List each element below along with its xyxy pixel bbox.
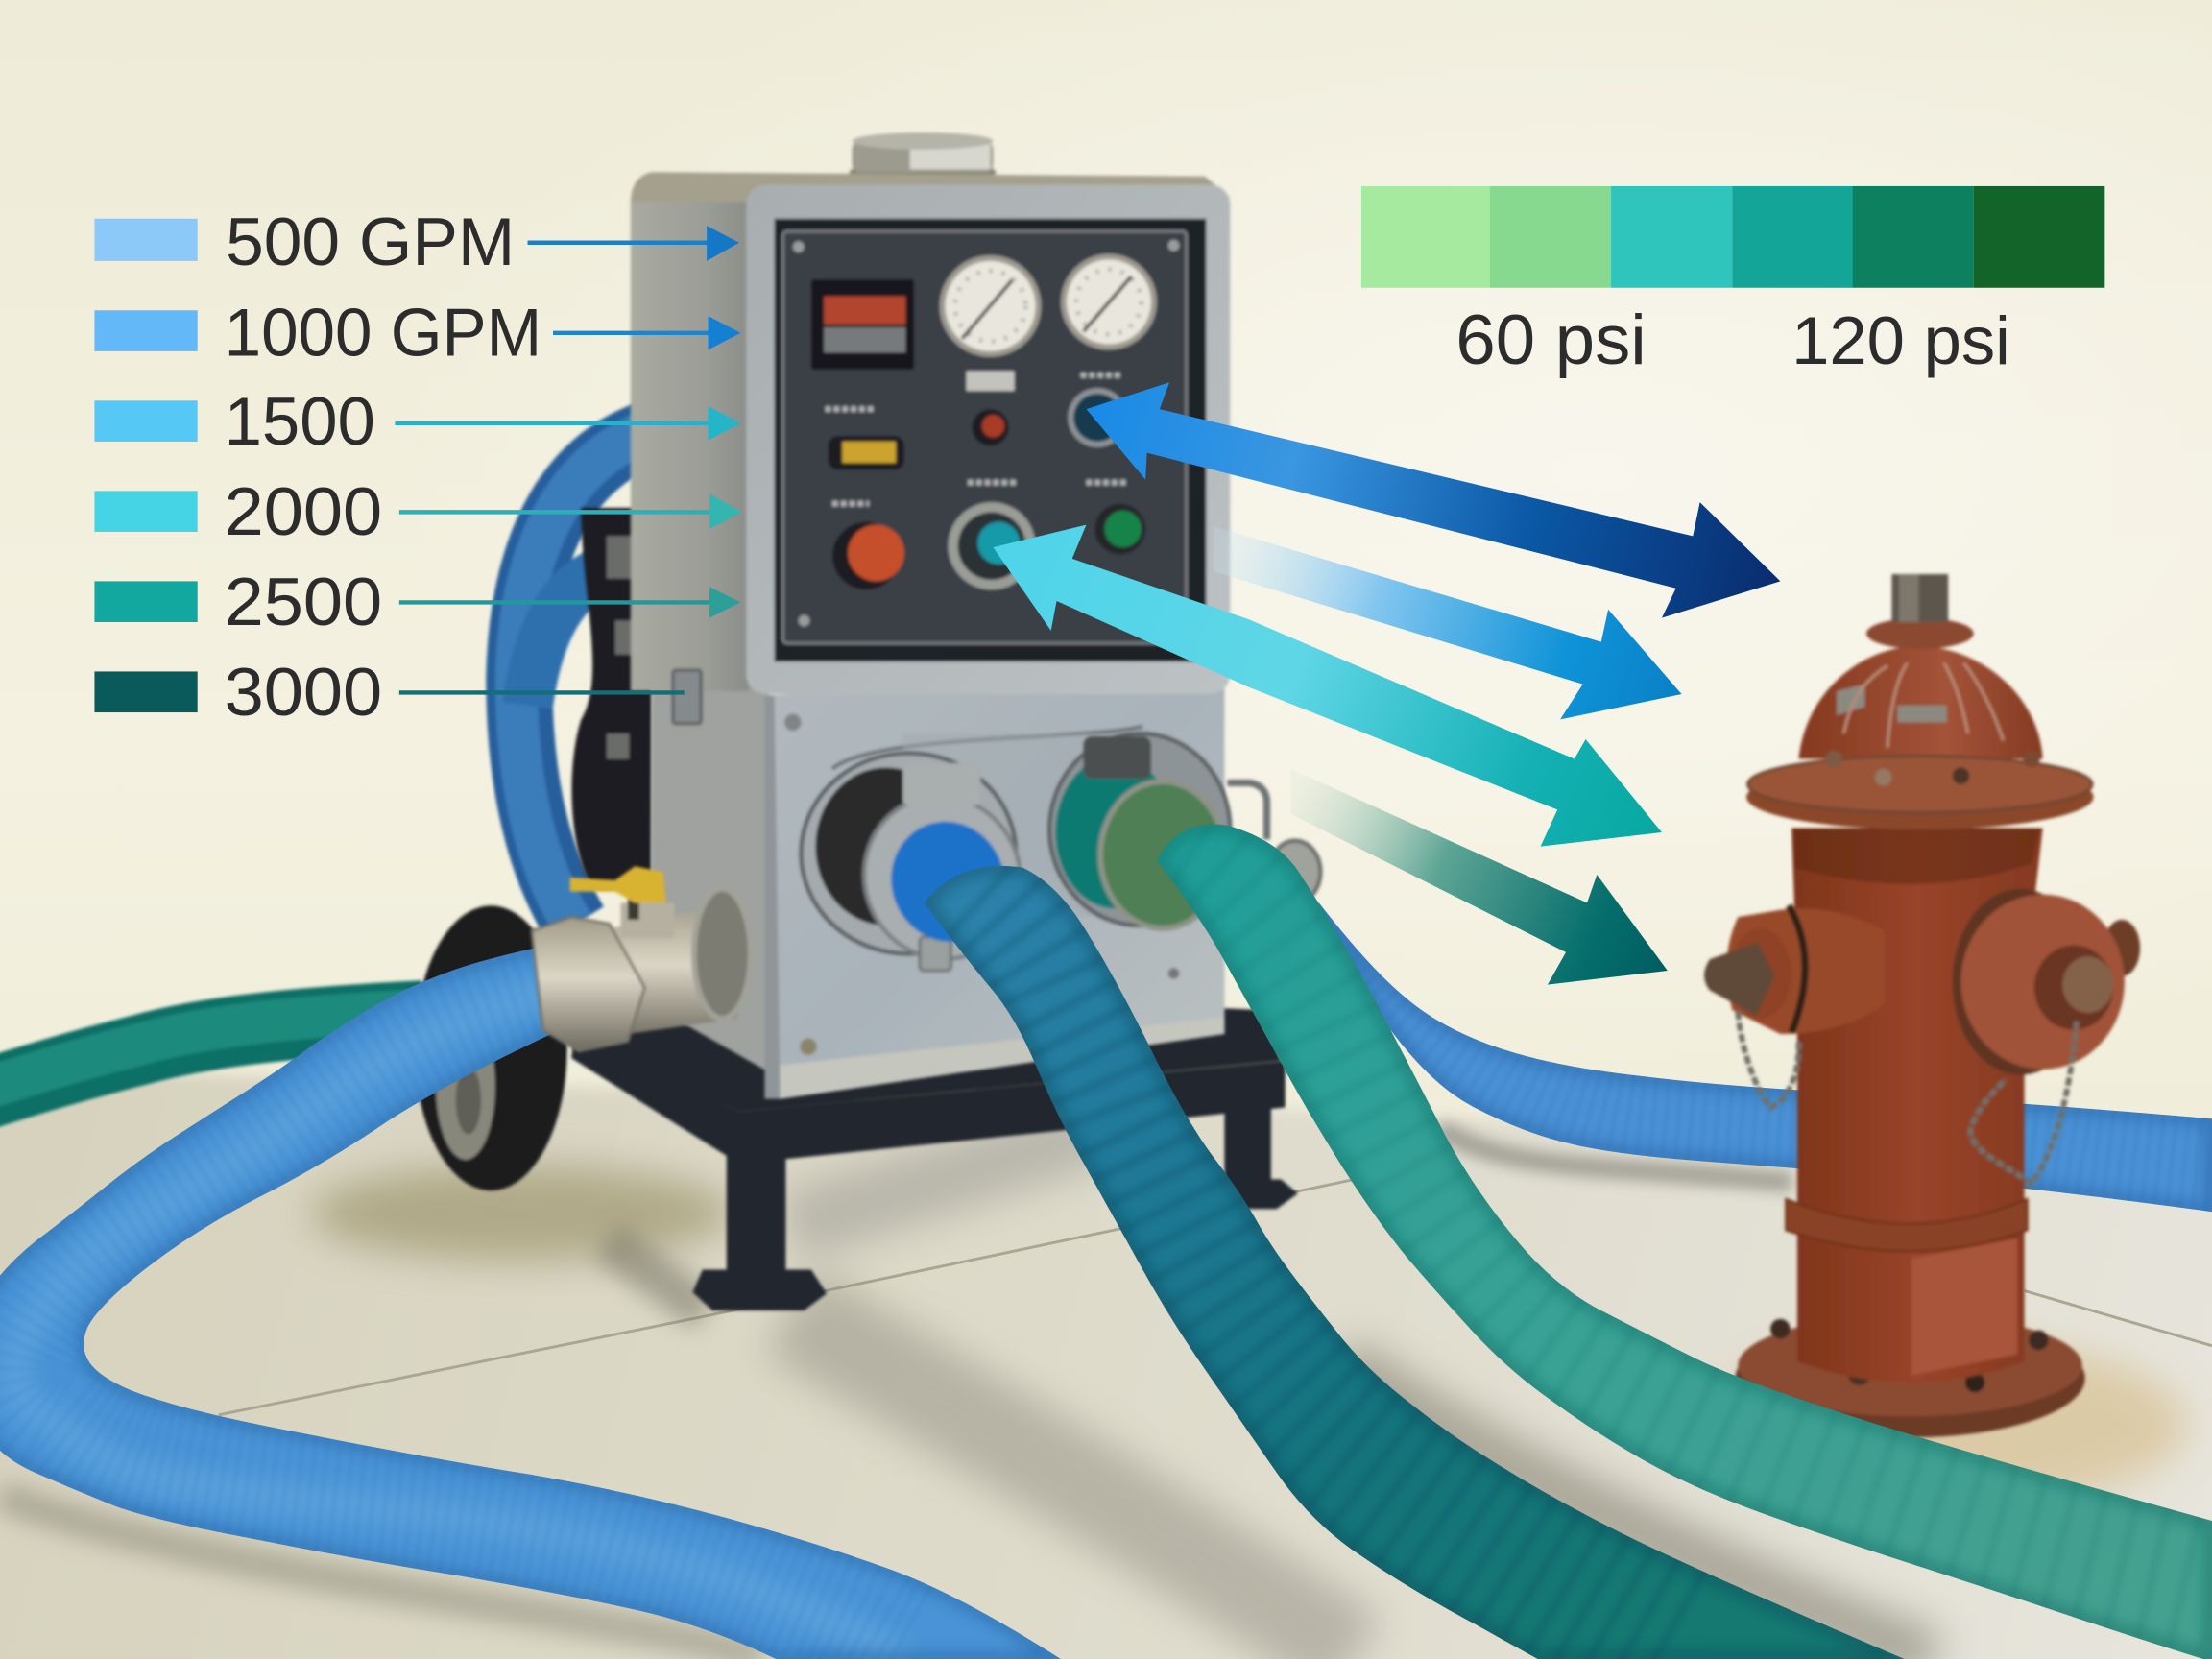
cabinet top face: [631, 172, 1230, 204]
legend row: 1000 GPM: [94, 294, 740, 370]
legend row: 500 GPM: [94, 204, 739, 279]
red stop button: [832, 522, 904, 589]
arrow: cyan, pump knob to hydrant: [993, 525, 1662, 847]
legend row: 3000: [94, 654, 685, 730]
inlet valve: [532, 866, 751, 1051]
hydrant: [1704, 574, 2140, 1437]
hose: green-teal right: [1157, 825, 2212, 1659]
side latch: [673, 670, 701, 724]
control panel: [783, 231, 1187, 643]
pump cabinet: [631, 132, 1230, 1099]
hydrant top cap: [1866, 574, 1974, 649]
hose: blue left loop: [0, 943, 1061, 1659]
flow legend: [94, 204, 742, 730]
arrow: light blue to hydrant: [1214, 526, 1682, 719]
legend row: 1500: [94, 383, 740, 459]
digital display: [811, 279, 914, 370]
legend row: 2000: 2000: [225, 473, 382, 549]
hose: blue rear right: [1312, 902, 2212, 1212]
engine behind the cabinet: [572, 508, 652, 889]
right hose coupling: [1049, 733, 1320, 928]
legend row: 2500: 2500: [225, 564, 382, 639]
yellow switch: [829, 436, 904, 469]
cabinet filler cap: [850, 132, 996, 183]
left hose coupling: [802, 754, 1044, 981]
small red indicator: [972, 409, 1009, 445]
lower hexagonal section: [1911, 1238, 2017, 1376]
hose: blue to teal centre: [924, 866, 1905, 1659]
yellow valve handle: [570, 866, 666, 902]
barrel ring: [1786, 1199, 2028, 1251]
pressure scale: [1361, 186, 2104, 379]
hose: teal rear left: [0, 1010, 423, 1103]
legend row: 1500: 1500: [225, 383, 375, 459]
green indicator: [1094, 504, 1145, 554]
hydrant flange: [1746, 751, 2094, 830]
nameplate: [967, 371, 1014, 391]
arrow: dark teal to hydrant: [1290, 769, 1668, 985]
pressure colour bar: [1361, 186, 2104, 288]
hydrant base: [1735, 1314, 2085, 1437]
legend row: 2000: [94, 473, 742, 549]
steel base frame: [571, 988, 1298, 1310]
blue knob: [1068, 388, 1127, 447]
legend row: 2500: [94, 564, 740, 639]
lower front panel: [764, 674, 1224, 1099]
hydrant chains: [1738, 1012, 2077, 1184]
arrow: blue, pump knob to hydrant: [1086, 382, 1780, 618]
control panel recess: [775, 219, 1206, 661]
legend row: 3000: 3000: [225, 654, 382, 730]
hydrant left nozzle: [1704, 905, 1885, 1034]
hydrant right nozzle: [1953, 889, 2140, 1075]
hydrant dome: [1798, 646, 2043, 759]
pressure gauge left: [943, 258, 1038, 354]
hydrant barrel: [1791, 829, 2043, 1382]
upper front frame: [746, 184, 1230, 694]
central teal knob: [948, 502, 1036, 589]
pressure gauge right: [1064, 256, 1154, 347]
legend row: 500 GPM: 500 GPM: [226, 204, 515, 279]
legend row: 1000 GPM: 1000 GPM: [225, 294, 541, 370]
cabinet lower side: [650, 661, 769, 1072]
pressure label: 120 psi: 120 psi: [1791, 302, 2010, 378]
pressure label: 60 psi: 60 psi: [1455, 300, 1647, 379]
hoses: blue loops behind the pump: [517, 432, 646, 924]
cabinet upper side: [631, 202, 749, 691]
wheel: [415, 905, 567, 1190]
